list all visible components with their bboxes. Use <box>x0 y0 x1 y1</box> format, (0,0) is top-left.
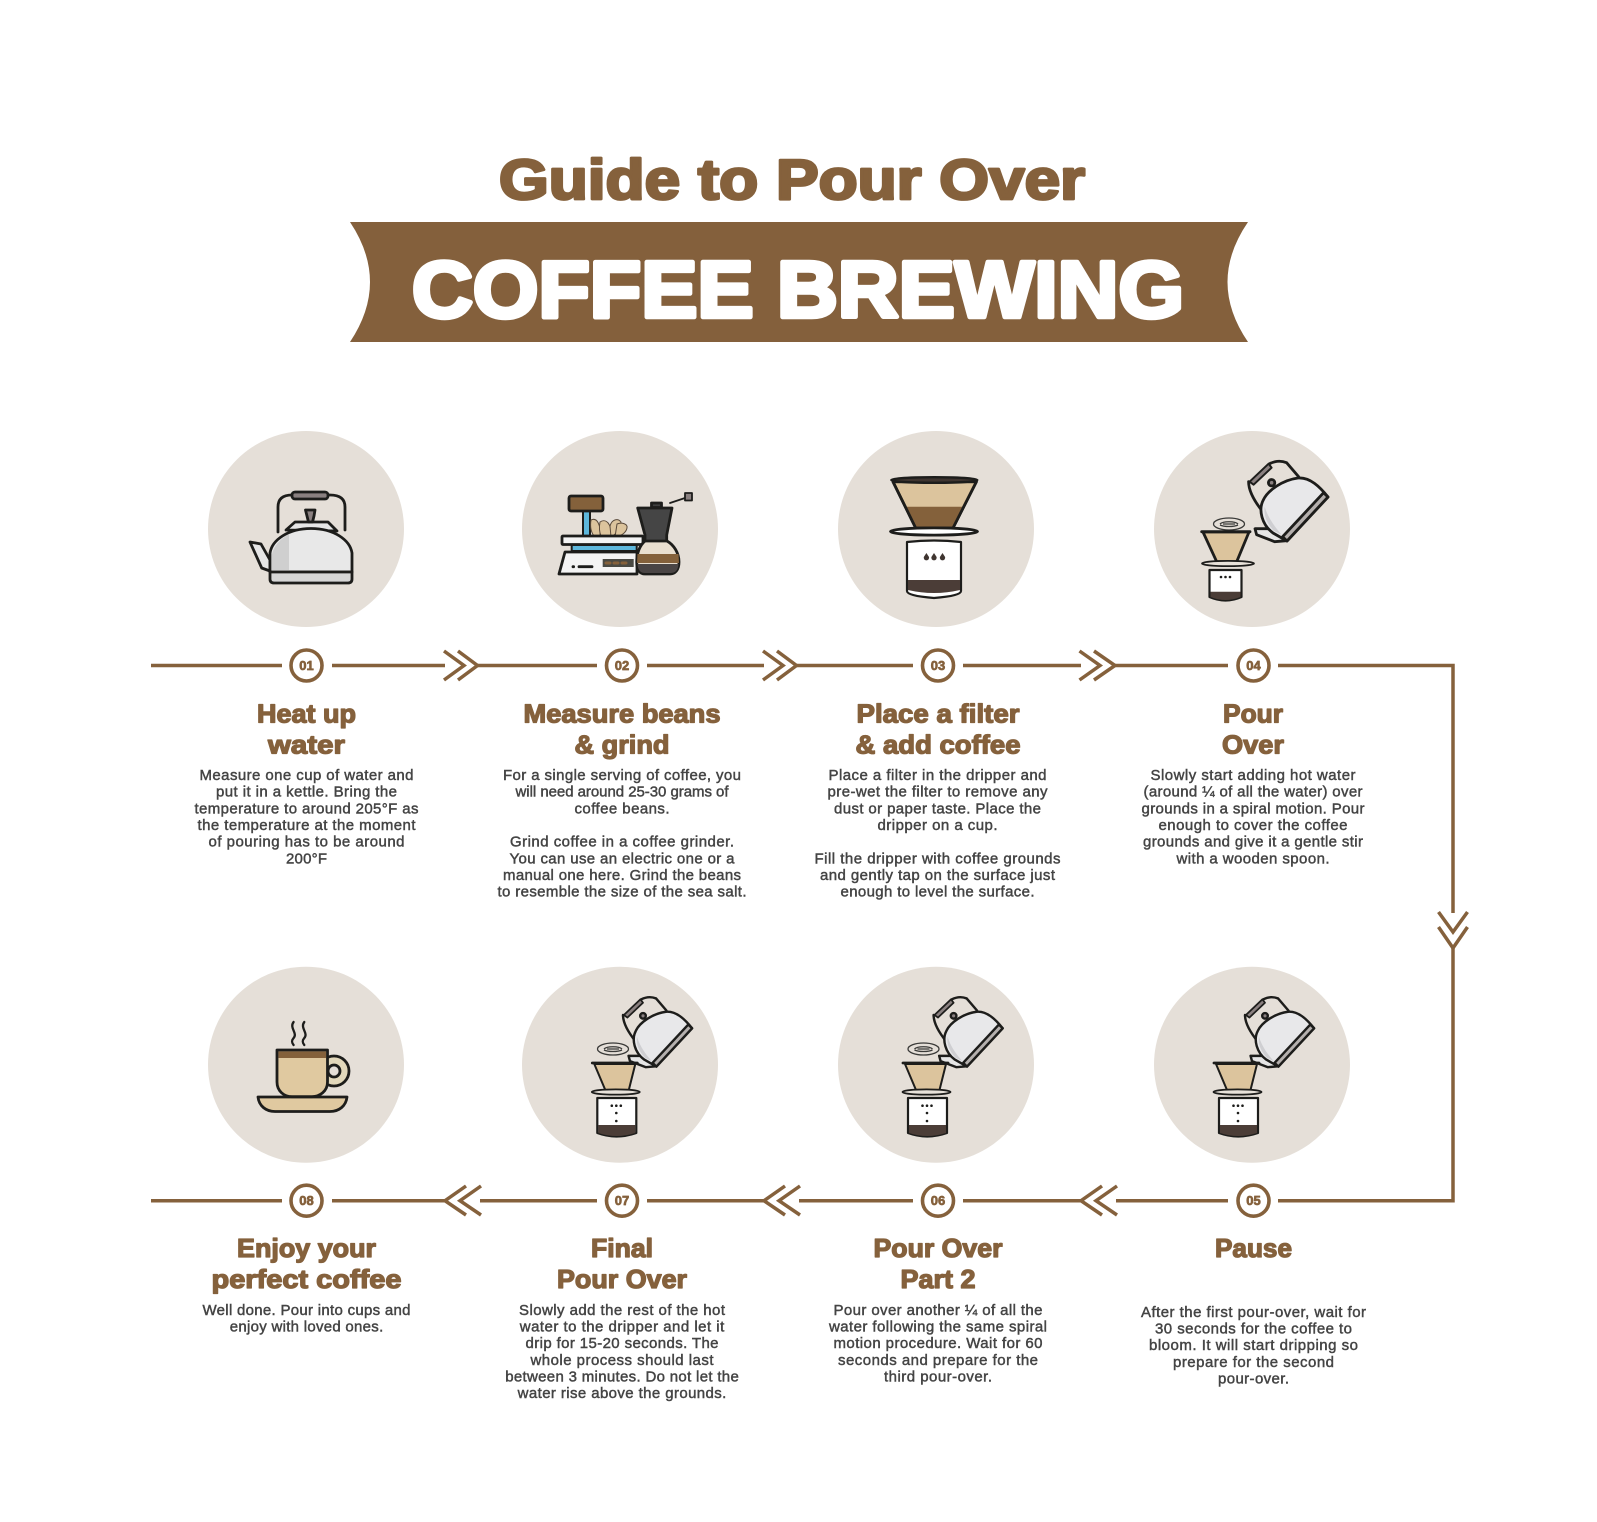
number badge 04 <box>1238 650 1269 681</box>
heading: Enjoy your <box>237 1233 376 1263</box>
heading: Heat up <box>257 698 356 728</box>
body text: with a wooden spoon. <box>1176 850 1330 867</box>
number badge 05: 05 <box>1246 1193 1261 1208</box>
heading <box>257 698 356 760</box>
body text: bloom. It will start dripping so <box>1149 1337 1358 1354</box>
body text <box>498 767 746 901</box>
heading <box>874 1233 1002 1294</box>
body text: whole process should last <box>530 1352 714 1369</box>
body text: dust or paper taste. Place the <box>834 800 1041 817</box>
body text: drip for 15-20 seconds. The <box>526 1335 718 1352</box>
body text: enough to cover the coffee <box>1158 817 1348 834</box>
body text: pre-wet the filter to remove any <box>828 784 1048 801</box>
heading: & add coffee <box>856 730 1020 760</box>
body text: pour-over. <box>1218 1370 1289 1387</box>
number badge 03: 03 <box>931 658 945 673</box>
icon: kettle pouring into dripper <box>1154 431 1350 627</box>
body text <box>194 767 418 867</box>
panel: step 05 pause <box>1141 967 1366 1387</box>
body text: motion procedure. Wait for 60 <box>834 1335 1042 1352</box>
heading: & grind <box>574 730 670 760</box>
number badge 02 <box>606 650 638 681</box>
number badge 03 <box>922 650 954 681</box>
body text: put it in a kettle. Bring the <box>216 784 397 801</box>
number badge 08 <box>291 1185 322 1216</box>
title: Guide to Pour Over <box>499 148 1085 212</box>
body text <box>505 1302 739 1402</box>
heading: Over <box>1222 730 1284 760</box>
icon: kettle pouring into dripper <box>838 967 1034 1163</box>
body text <box>1141 1304 1366 1387</box>
heading <box>557 1233 687 1294</box>
heading: Measure beans <box>524 698 720 728</box>
body text: grounds and give it a gentle stir <box>1143 834 1363 851</box>
body text: water following the same spiral <box>828 1319 1047 1336</box>
number badge 07 <box>606 1185 638 1216</box>
timeline flow line with arrows <box>151 651 1468 1215</box>
number badge 01 <box>291 650 322 681</box>
body text: enjoy with loved ones. <box>230 1319 383 1336</box>
body text <box>1142 767 1364 867</box>
body text: Fill the dripper with coffee grounds <box>814 850 1060 867</box>
body text: will need around 25-30 grams of <box>514 784 729 801</box>
heading: Final <box>591 1233 653 1263</box>
heading: Place a filter <box>856 698 1020 728</box>
body text: Measure one cup of water and <box>200 767 414 784</box>
icon: dripper on cup <box>838 431 1034 627</box>
panel: step 08 enjoy your perfect coffee <box>202 967 410 1336</box>
body text: Slowly add the rest of the hot <box>519 1302 726 1319</box>
body text: between 3 minutes. Do not let the <box>505 1368 739 1385</box>
body text <box>202 1302 410 1336</box>
body text: grounds in a spiral motion. Pour <box>1142 800 1364 817</box>
heading <box>212 1233 402 1294</box>
body text: Place a filter in the dripper and <box>828 767 1046 784</box>
number badge 06 <box>922 1185 954 1216</box>
number badge 05 <box>1238 1185 1269 1216</box>
icon: kettle over dripper <box>1154 967 1350 1163</box>
heading <box>856 698 1020 760</box>
body text: You can use an electric one or a <box>510 850 735 867</box>
icon: coffee cup on saucer <box>208 967 404 1163</box>
body text: temperature to around 205°F as <box>194 800 418 817</box>
panel: step 01 heat up water <box>194 431 418 867</box>
body text: water to the dripper and let it <box>519 1319 725 1336</box>
body text: manual one here. Grind the beans <box>503 867 741 884</box>
body text <box>814 767 1060 901</box>
banner: coffee brewing: COFFEE BREWING <box>412 245 1184 334</box>
number badge 02: 02 <box>615 658 629 673</box>
panel: step 03 place a filter and add coffee <box>814 431 1060 901</box>
heading: Part 2 <box>900 1264 976 1294</box>
heading: perfect coffee <box>212 1264 402 1294</box>
heading <box>524 698 720 760</box>
body text <box>828 1302 1047 1385</box>
body text: dripper on a cup. <box>878 817 998 834</box>
panel: step 02 measure beans and grind <box>498 431 746 901</box>
body text: 200°F <box>286 850 327 867</box>
body text: seconds and prepare for the <box>838 1352 1038 1369</box>
body text: to resemble the size of the sea salt. <box>498 884 746 901</box>
body text: and gently tap on the surface just <box>820 867 1056 884</box>
body text: coffee beans. <box>574 800 670 817</box>
panel: step 06 pour over part 2 <box>828 967 1047 1385</box>
heading: water <box>267 730 345 760</box>
heading: Pause <box>1215 1233 1292 1263</box>
body text: enough to level the surface. <box>840 884 1034 901</box>
body text: For a single serving of coffee, you <box>503 767 741 784</box>
number badge 06: 06 <box>931 1193 945 1208</box>
panel: step 04 pour over <box>1142 431 1364 867</box>
number badge 04: 04 <box>1246 658 1261 673</box>
heading: Pour Over <box>557 1264 687 1294</box>
panel: step 07 final pour over <box>505 967 739 1402</box>
body text: the temperature at the moment <box>198 817 416 834</box>
body text: Well done. Pour into cups and <box>202 1302 410 1319</box>
body text: of pouring has to be around <box>208 834 404 851</box>
body text: Slowly start adding hot water <box>1150 767 1356 784</box>
body text: After the first pour-over, wait for <box>1141 1304 1366 1321</box>
body text: (around ¼ of all the water) over <box>1144 784 1362 801</box>
body text: prepare for the second <box>1173 1354 1334 1371</box>
icon: scale and grinder <box>522 431 718 627</box>
body text: Pour over another ¼ of all the <box>834 1302 1042 1319</box>
body text: water rise above the grounds. <box>517 1385 726 1402</box>
heading <box>1222 698 1284 760</box>
heading: Pour Over <box>874 1233 1002 1263</box>
body text: third pour-over. <box>884 1368 992 1385</box>
number badge 01: 01 <box>299 658 314 673</box>
icon: kettle <box>208 431 404 627</box>
number badge 07: 07 <box>615 1193 629 1208</box>
number badge 08: 08 <box>299 1193 314 1208</box>
body text: Grind coffee in a coffee grinder. <box>510 834 734 851</box>
body text: 30 seconds for the coffee to <box>1155 1321 1352 1338</box>
icon: kettle pouring into dripper <box>522 967 718 1163</box>
banner: coffee brewing <box>350 222 1248 342</box>
heading: Pour <box>1223 698 1283 728</box>
